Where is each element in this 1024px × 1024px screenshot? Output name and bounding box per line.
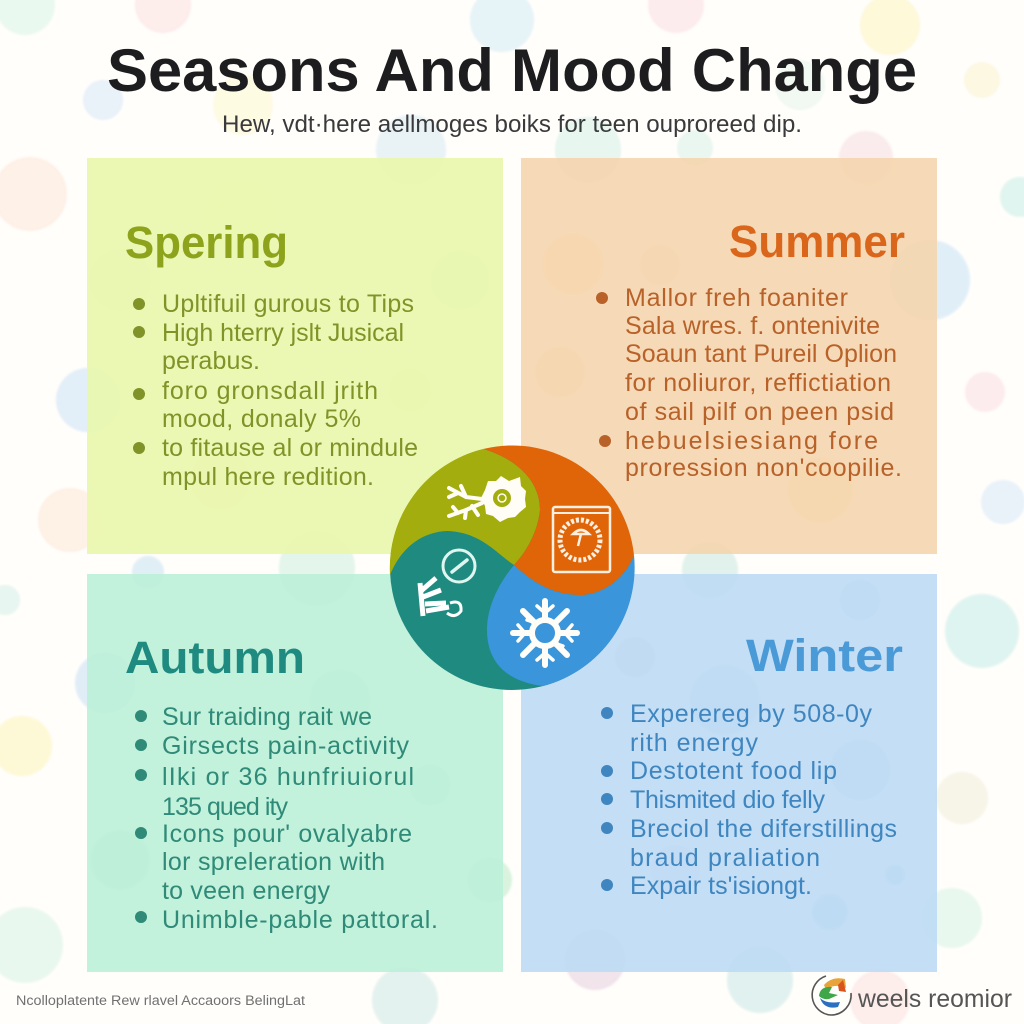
summer bullet list: for noliuror, reffictiation [625, 369, 891, 397]
panel: autumn [87, 574, 503, 972]
autumn bullet list: lIki or 36 hunfriuiorul [162, 763, 414, 791]
autumn bullet list: lor spreleration with [162, 848, 385, 876]
icon: compass and leaf [420, 550, 475, 616]
autumn bullet list: 135 qued ity [162, 793, 288, 821]
footer note: Ncolloplatente Rew rlavel Accaoors BelingLat [16, 993, 305, 1008]
winter bullet list: Destotent food lip [630, 757, 837, 785]
summer bullet list: of sail pilf on peen psid [625, 398, 894, 426]
autumn bullet list: Sur traiding rait we [162, 703, 372, 731]
subtitle: Hew, vdt·here aellmoges boiks for teen ouproreed dip. [222, 111, 802, 138]
spring bullet list: mpul here redition. [162, 463, 374, 491]
autumn bullet list: Girsects pain-activity [162, 732, 410, 760]
spring bullet list: to fitause al or mindule [162, 434, 418, 462]
heading: summer: Summer [729, 216, 905, 267]
summer bullet list: Mallor freh foaniter [625, 284, 848, 312]
summer bullet list: Sala wres. f. ontenivite [625, 312, 880, 340]
panel: spring [87, 158, 503, 554]
wheel segment: olive spring [390, 449, 540, 575]
spring bullet list: High hterry jslt Jusical [162, 319, 404, 347]
icon: snowflake [513, 601, 577, 665]
summer bullet list: proression non'coopilie. [625, 454, 902, 482]
heading: autumn: Autumn [125, 632, 305, 683]
summer bullet list [596, 284, 902, 482]
autumn bullet list: Icons pour' ovalyabre [162, 820, 412, 848]
icon: washer dial frame [553, 507, 610, 572]
autumn bullet list [135, 703, 438, 934]
winter bullet list [601, 700, 897, 900]
wheel segment: orange summer [483, 445, 634, 595]
summer bullet list: hebuelsiesiang fore [625, 427, 878, 455]
heading: winter: Winter [746, 630, 903, 681]
central season wheel [390, 445, 635, 690]
wheel segment: blue winter [487, 555, 635, 686]
winter bullet list: Experereg by 508-0y [630, 700, 872, 728]
icon: snow branch and sun [449, 476, 526, 522]
logo mark [812, 976, 851, 1015]
winter bullet list: Expair ts'isiongt. [630, 872, 812, 900]
panel: winter [521, 574, 937, 972]
winter bullet list: braud praliation [630, 844, 820, 872]
winter bullet list: Thismited dio felly [630, 786, 826, 814]
logo wordmark: weels reomior [857, 985, 1012, 1013]
brand logo [812, 976, 1012, 1015]
winter bullet list: Breciol the diferstillings [630, 815, 897, 843]
spring bullet list [133, 290, 418, 491]
autumn bullet list: to veen energy [162, 877, 330, 905]
spring bullet list: perabus. [162, 347, 260, 375]
winter bullet list: rith energy [630, 729, 758, 757]
spring bullet list: foro gronsdall jrith [162, 377, 378, 405]
heading: spring: Spering [125, 217, 288, 268]
panel: summer [521, 158, 937, 554]
title: Seasons And Mood Change [107, 37, 917, 104]
summer bullet list: Soaun tant Pureil Oplion [625, 340, 897, 368]
spring bullet list: mood, donaly 5% [162, 405, 361, 433]
spring bullet list: Upltifuil gurous to Tips [162, 290, 414, 318]
autumn bullet list: Unimble-pable pattoral. [162, 906, 438, 934]
